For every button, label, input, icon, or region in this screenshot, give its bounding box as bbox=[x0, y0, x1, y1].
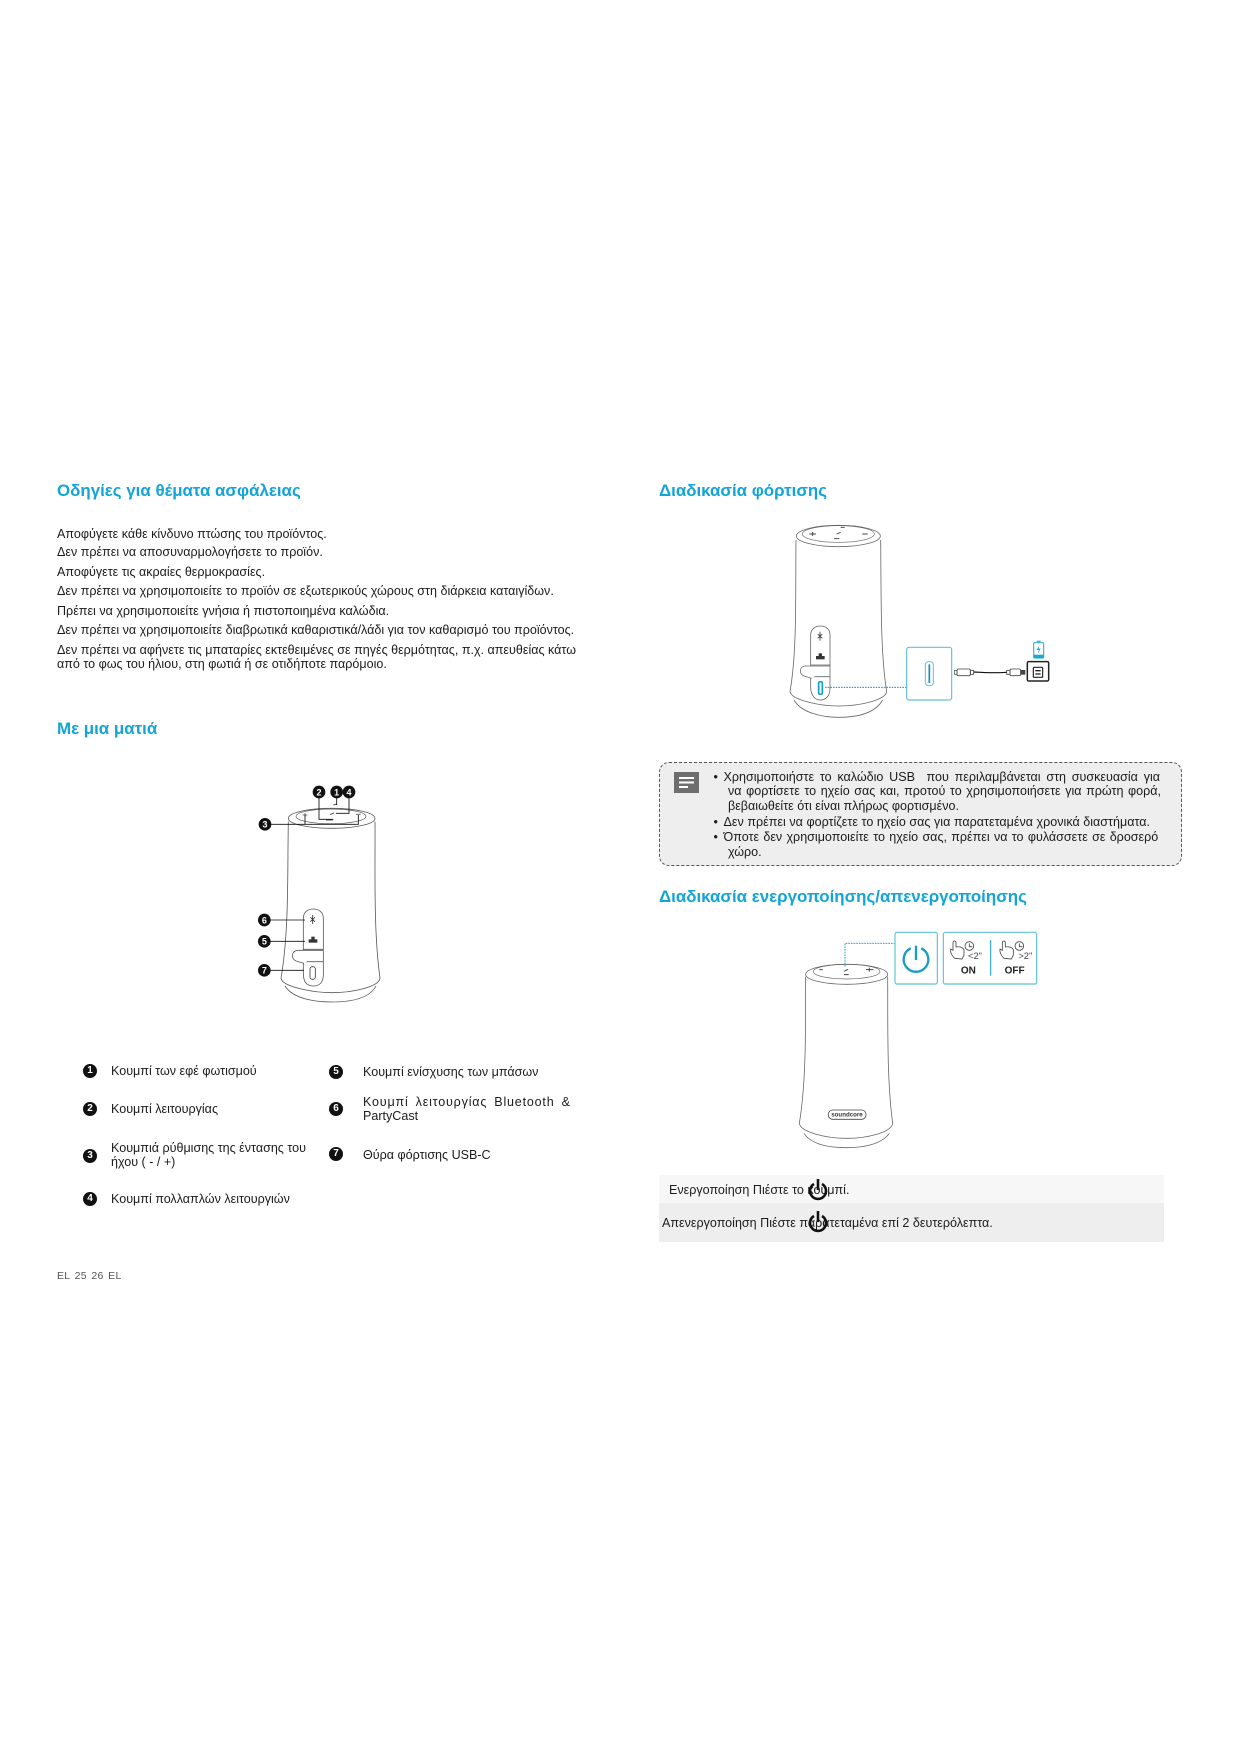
power button box bbox=[895, 932, 937, 984]
tips text: Χρησιμοποιήστε το καλώδιο USB που περιλαμβάνεται στη συσκευασία για bbox=[724, 770, 1160, 784]
on/off instruction box bbox=[943, 932, 1037, 984]
dotted link bbox=[845, 943, 895, 967]
item 6 bbox=[329, 1095, 571, 1123]
text block: safety list: Πρέπει να χρησιμοποιείτε γνήσια ή πιστοποιημένα καλώδια. bbox=[57, 604, 389, 618]
callout number badges: 3 bbox=[262, 820, 268, 830]
item 3: ήχου ( - / +) bbox=[111, 1155, 175, 1169]
speaker bbox=[799, 964, 893, 1148]
callout number badges: 6 bbox=[262, 915, 267, 925]
heading: power on/off: Διαδικασία ενεργοποίησης/απενεργοποίησης bbox=[659, 887, 1027, 906]
control panel bbox=[292, 909, 323, 986]
speaker top bbox=[288, 804, 375, 828]
item 7: 7 bbox=[333, 1148, 339, 1159]
callout number badges: 4 bbox=[346, 787, 352, 797]
USB cable bbox=[954, 669, 1025, 676]
row: power on: Ενεργοποίηση Πιέστε το κουμπί. bbox=[669, 1183, 849, 1197]
item 3 bbox=[83, 1141, 306, 1169]
speaker: soundcore bbox=[831, 1112, 863, 1119]
callout number badges: 1 bbox=[334, 787, 339, 797]
speaker body bbox=[281, 822, 380, 1002]
callout number badges: 2 bbox=[316, 787, 322, 797]
icon: note bbox=[674, 772, 699, 793]
USB-C port highlight and dotted link bbox=[819, 682, 907, 694]
legend: parts list bbox=[83, 1064, 571, 1206]
tips text: βεβαιωθείτε ότι είναι πλήρως φορτισμένο. bbox=[728, 799, 959, 813]
diagram: speaker with numbered callouts bbox=[258, 786, 380, 1002]
text block: safety list: Δεν πρέπει να χρησιμοποιείτε διαβρωτικά καθαριστικά/λάδι για τον καθαρισμό του προϊόντος. bbox=[57, 623, 574, 637]
tips text: Δεν πρέπει να φορτίζετε το ηχείο σας για παρατεταμένα χρονικά διαστήματα. bbox=[724, 815, 1150, 829]
tips text: • bbox=[714, 770, 718, 784]
on/off instruction box: >2" bbox=[1018, 951, 1032, 961]
callout number badges: 5 bbox=[262, 937, 267, 947]
text block: safety list: Δεν πρέπει να χρησιμοποιείτε το προϊόν σε εξωτερικούς χώρους στη διάρκεια καταιγίδων. bbox=[57, 584, 554, 598]
tips text: Όποτε δεν χρησιμοποιείτε το ηχείο σας, πρέπει να το φυλάσσετε σε δροσερό bbox=[724, 830, 1158, 844]
item 1: 1 bbox=[87, 1065, 93, 1076]
item 3: 3 bbox=[87, 1150, 93, 1161]
tips text: να φορτίσετε το ηχείο σας και, προτού το χρησιμοποιήσετε για πρώτη φορά, bbox=[728, 784, 1161, 798]
row: power off: Απενεργοποίηση Πιέστε παρατεταμένα επί 2 δευτερόλεπτα. bbox=[662, 1216, 993, 1230]
diagram: power on/off bbox=[798, 932, 1038, 1148]
item 3: Κουμπιά ρύθμισης της έντασης του bbox=[111, 1141, 306, 1155]
tips text: • bbox=[714, 815, 718, 829]
table: power instructions bbox=[659, 1179, 1164, 1242]
item 4: Κουμπί πολλαπλών λειτουργιών bbox=[111, 1192, 290, 1206]
battery icon bbox=[1034, 641, 1044, 658]
text block: safety list bbox=[57, 527, 576, 671]
note box: charging tips bbox=[659, 762, 1182, 866]
icon: power bbox=[808, 1211, 828, 1232]
heading: charging: Διαδικασία φόρτισης bbox=[659, 481, 827, 500]
item 2: 2 bbox=[87, 1103, 93, 1114]
speaker bbox=[790, 525, 887, 717]
item 6: PartyCast bbox=[363, 1109, 418, 1123]
callout number badges bbox=[258, 786, 355, 977]
row: power off bbox=[659, 1203, 1164, 1242]
item 4: 4 bbox=[87, 1193, 93, 1204]
item 6: 6 bbox=[333, 1103, 339, 1114]
text block: safety list: Δεν πρέπει να αποσυναρμολογήσετε το προϊόν. bbox=[57, 545, 323, 559]
icon: power bbox=[809, 1179, 828, 1200]
text block: safety list: από το φως του ήλιου, στη φωτιά ή σε οτιδήποτε παρόμοιο. bbox=[57, 657, 387, 671]
tips text bbox=[714, 770, 1161, 859]
diagram: charging the speaker bbox=[790, 524, 1050, 718]
text block: safety list: Δεν πρέπει να αφήνετε τις μπαταρίες εκτεθειμένες σε πηγές θερμότητας, π.χ. απευθείας κάτω bbox=[57, 643, 576, 657]
tips text: • bbox=[714, 830, 718, 844]
item 1: Κουμπί των εφέ φωτισμού bbox=[111, 1064, 257, 1078]
callout number badges: 7 bbox=[262, 966, 267, 976]
text block: safety list: Αποφύγετε κάθε κίνδυνο πτώσης του προϊόντος. bbox=[57, 527, 327, 541]
item 7: Θύρα φόρτισης USB-C bbox=[363, 1148, 491, 1162]
callout lines bbox=[269, 797, 358, 970]
heading: safety instructions: Οδηγίες για θέματα ασφάλειας bbox=[57, 481, 301, 500]
on/off instruction box: OFF bbox=[1005, 965, 1025, 976]
item 6: Κουμπί λειτουργίας Bluetooth & bbox=[363, 1095, 571, 1109]
tips text: χώρο. bbox=[728, 845, 762, 859]
item 5: Κουμπί ενίσχυσης των μπάσων bbox=[363, 1065, 538, 1079]
on/off instruction box: <2" bbox=[968, 951, 982, 961]
enlarged port box bbox=[907, 647, 952, 700]
wall charger bbox=[1027, 662, 1049, 681]
item 5: 5 bbox=[333, 1066, 339, 1077]
footer: page numbers: EL 25 26 EL bbox=[57, 1270, 122, 1282]
row: power on bbox=[659, 1175, 1164, 1203]
text block: safety list: Αποφύγετε τις ακραίες θερμοκρασίες. bbox=[57, 565, 265, 579]
on/off instruction box: ON bbox=[961, 965, 976, 976]
item 2: Κουμπί λειτουργίας bbox=[111, 1102, 218, 1116]
heading: at a glance: Με μια ματιά bbox=[57, 719, 157, 738]
